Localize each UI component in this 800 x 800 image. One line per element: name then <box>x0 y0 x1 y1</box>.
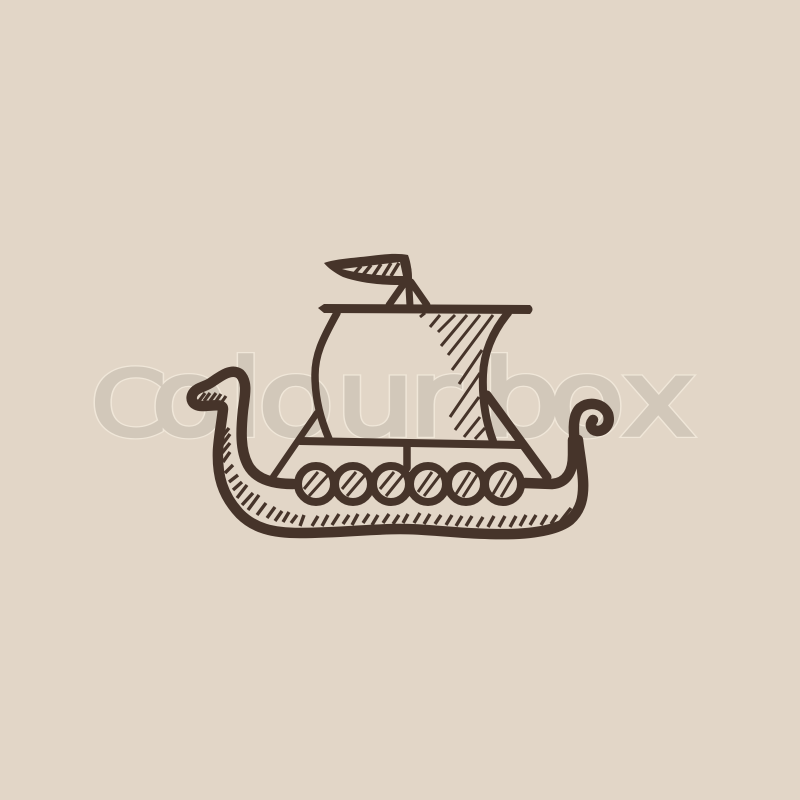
flag <box>324 254 412 285</box>
watermark: Colourbox: C <box>91 353 166 457</box>
sail shading <box>420 313 493 439</box>
shield 2 <box>335 466 371 502</box>
mast and flag stays <box>389 270 427 306</box>
watermark: Colourbox: olourbox <box>151 338 695 461</box>
sail left edge <box>315 313 337 439</box>
watermark: Colourbox: olourbox <box>151 338 695 461</box>
shield 6 <box>485 466 521 502</box>
shields row <box>298 466 521 502</box>
shield 3 <box>373 466 409 502</box>
icon: viking ship <box>192 254 609 534</box>
hull shading <box>222 428 571 527</box>
stern inner line <box>525 440 573 484</box>
shield shading <box>304 472 514 497</box>
sail right edge <box>483 313 508 441</box>
centre mast <box>403 445 411 468</box>
hull outline <box>192 372 583 534</box>
bow head shading <box>199 393 226 403</box>
shield 5 <box>448 466 484 502</box>
shield 1 <box>298 466 334 502</box>
lower yard <box>300 441 520 445</box>
watermark: Colourbox: C <box>91 353 166 457</box>
stern spiral <box>574 404 609 445</box>
shield 4 <box>410 466 446 502</box>
right stay <box>487 395 547 477</box>
left stay <box>273 413 317 477</box>
sail yard <box>318 304 532 314</box>
